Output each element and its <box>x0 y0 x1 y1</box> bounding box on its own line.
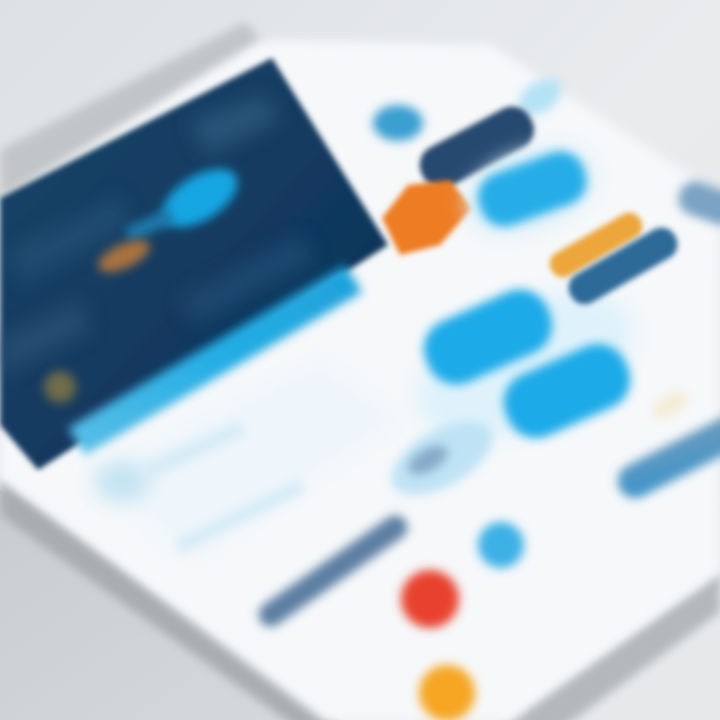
lower device edge <box>0 478 340 720</box>
slate long bar <box>254 511 412 631</box>
lower-left shadow area <box>0 490 340 720</box>
blue glow streak on screen <box>125 208 175 242</box>
steel-blue bar <box>563 222 683 310</box>
orange bar <box>545 208 647 282</box>
slate chip right <box>674 177 720 229</box>
blue circle <box>478 522 524 568</box>
screen highlights <box>0 95 315 375</box>
orange hexagon <box>382 180 472 255</box>
lower right device edge <box>500 572 720 720</box>
blue pill top <box>471 145 593 233</box>
yellow dot on screen <box>44 371 76 403</box>
pale blue block <box>94 462 150 502</box>
large pill halo <box>395 262 655 468</box>
pale panel lower left <box>95 360 400 560</box>
pale blue shape centre <box>380 406 504 510</box>
pale line 2 <box>175 478 306 555</box>
large blue pill left <box>414 280 562 394</box>
blue dot top <box>373 105 423 141</box>
pale line 1 <box>140 420 246 482</box>
large blue pill right <box>494 334 640 448</box>
blue pill halo <box>455 132 605 248</box>
amber circle <box>419 665 475 720</box>
device grey edge <box>0 22 275 200</box>
slate spot in pale shape <box>403 439 453 481</box>
cyan strip below screen <box>68 265 362 455</box>
blue oval on screen <box>153 157 247 239</box>
navy pill <box>413 99 541 196</box>
pale accent right <box>648 386 692 424</box>
orange mark on screen <box>94 233 154 279</box>
pale blue chip top <box>512 71 568 123</box>
right slanted blue bar <box>612 410 720 504</box>
red circle <box>401 570 459 628</box>
dark screen panel <box>0 58 388 470</box>
